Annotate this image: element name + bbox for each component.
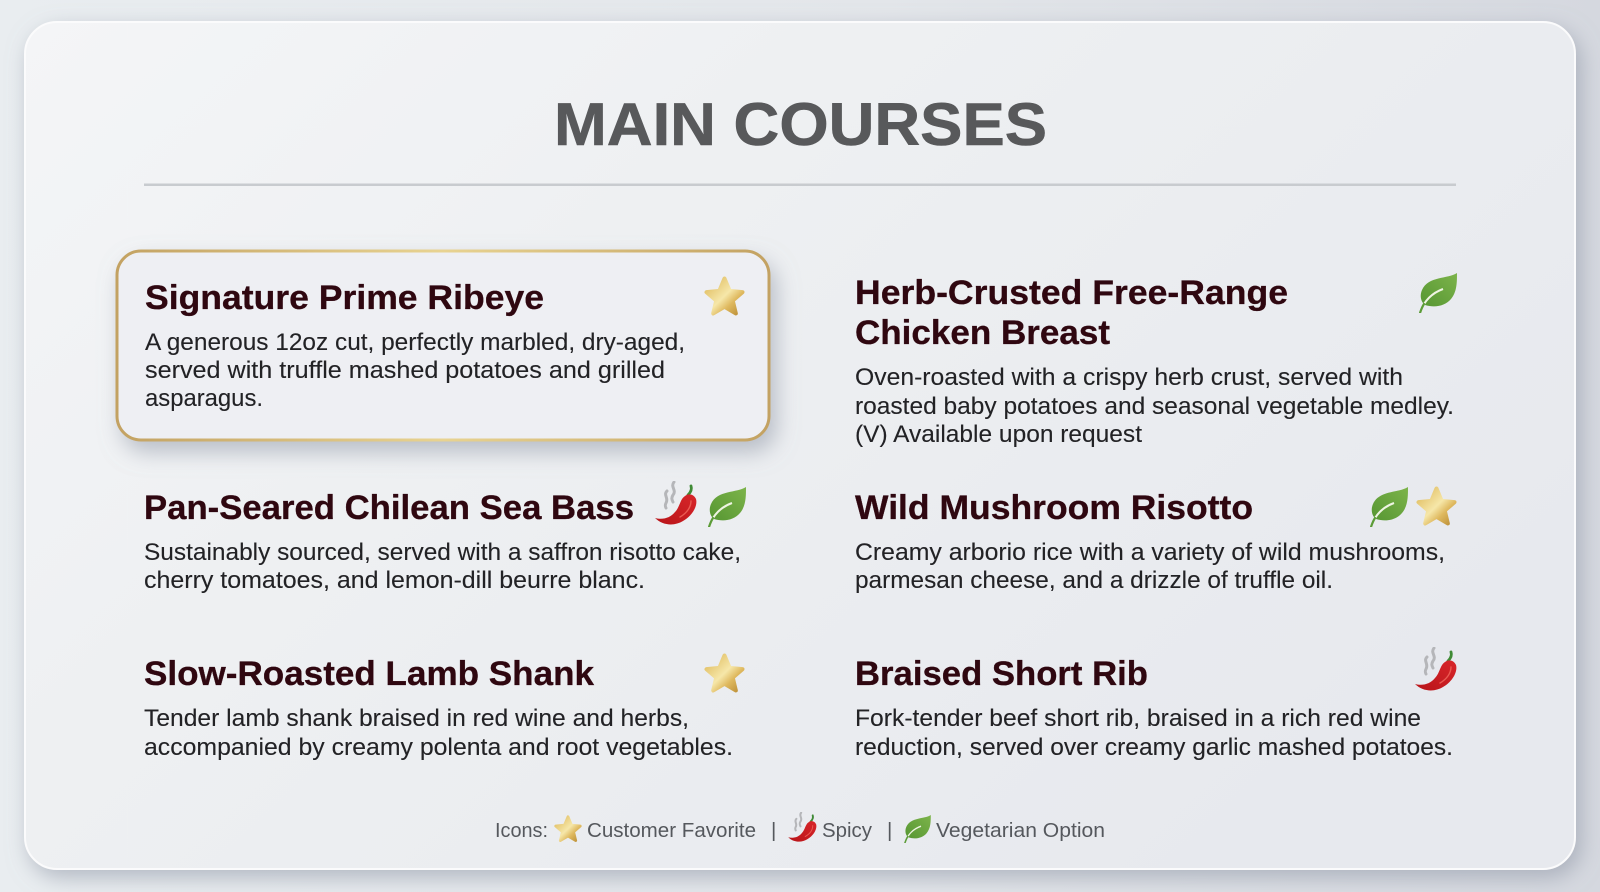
icon: chili [1415,648,1456,690]
legend: Customer Favorite [587,819,756,842]
menu item: Wild Mushroom Risotto [855,487,1454,594]
description [145,329,685,412]
menu item: Slow-Roasted Lamb Shank [144,655,742,761]
icon: legend leaf [905,815,931,843]
dish name: Chicken Breast [855,314,1111,352]
card border [117,251,769,440]
description: parmesan cheese, and a drizzle of truffle oil. [855,567,1333,594]
description [144,539,741,594]
featured card: Signature Prime Ribeye [117,251,769,440]
menu item: Herb-Crusted Free-Range Chicken Breast [855,273,1457,448]
dish name: Slow-Roasted Lamb Shank [144,655,595,693]
icon: leaf [1371,487,1408,527]
legend: | [771,819,776,842]
description: reduction, served over creamy garlic mashed potatoes. [855,734,1453,761]
icon: legend chili [788,813,816,842]
icon: star [707,279,742,313]
title: MAIN COURSES [554,91,1047,158]
description [855,705,1453,761]
legend: | [887,819,892,842]
description: asparagus. [145,385,263,412]
icon: star [707,656,742,690]
description: Tender lamb shank braised in red wine and herbs, [144,705,689,732]
description [144,705,733,761]
description: Oven-roasted with a crispy herb crust, served with [855,364,1403,391]
description [855,539,1445,594]
description [855,364,1454,448]
icon: leaf [709,487,746,527]
description: Fork-tender beef short rib, braised in a rich red wine [855,705,1421,732]
icon: legend star [556,817,580,841]
description: Creamy arborio rice with a variety of wild mushrooms, [855,539,1445,566]
legend: Spicy [822,819,873,842]
icon: leaf [1420,273,1457,313]
dish name: Pan-Seared Chilean Sea Bass [144,489,634,527]
description: roasted baby potatoes and seasonal vegetable medley. [855,393,1454,420]
icon: star [1419,489,1454,523]
description: (V) Available upon request [855,421,1142,448]
legend [495,813,1105,843]
menu item: Braised Short Rib [855,648,1456,761]
description: served with truffle mashed potatoes and grilled [145,357,665,384]
dish name: Signature Prime Ribeye [145,279,544,317]
menu item: Pan-Seared Chilean Sea Bass [144,482,746,594]
dish name: Wild Mushroom Risotto [855,489,1253,527]
description: Sustainably sourced, served with a saffron risotto cake, [144,539,741,566]
dish name [855,274,1288,352]
legend: Icons: [495,819,548,842]
description: A generous 12oz cut, perfectly marbled, dry-aged, [145,329,685,356]
dish name: Herb-Crusted Free-Range [855,274,1288,312]
description: accompanied by creamy polenta and root vegetables. [144,734,733,761]
description: cherry tomatoes, and lemon-dill beurre blanc. [144,567,645,594]
icon: chili [655,482,696,524]
legend: Vegetarian Option [936,819,1105,842]
dish name: Braised Short Rib [855,655,1148,693]
